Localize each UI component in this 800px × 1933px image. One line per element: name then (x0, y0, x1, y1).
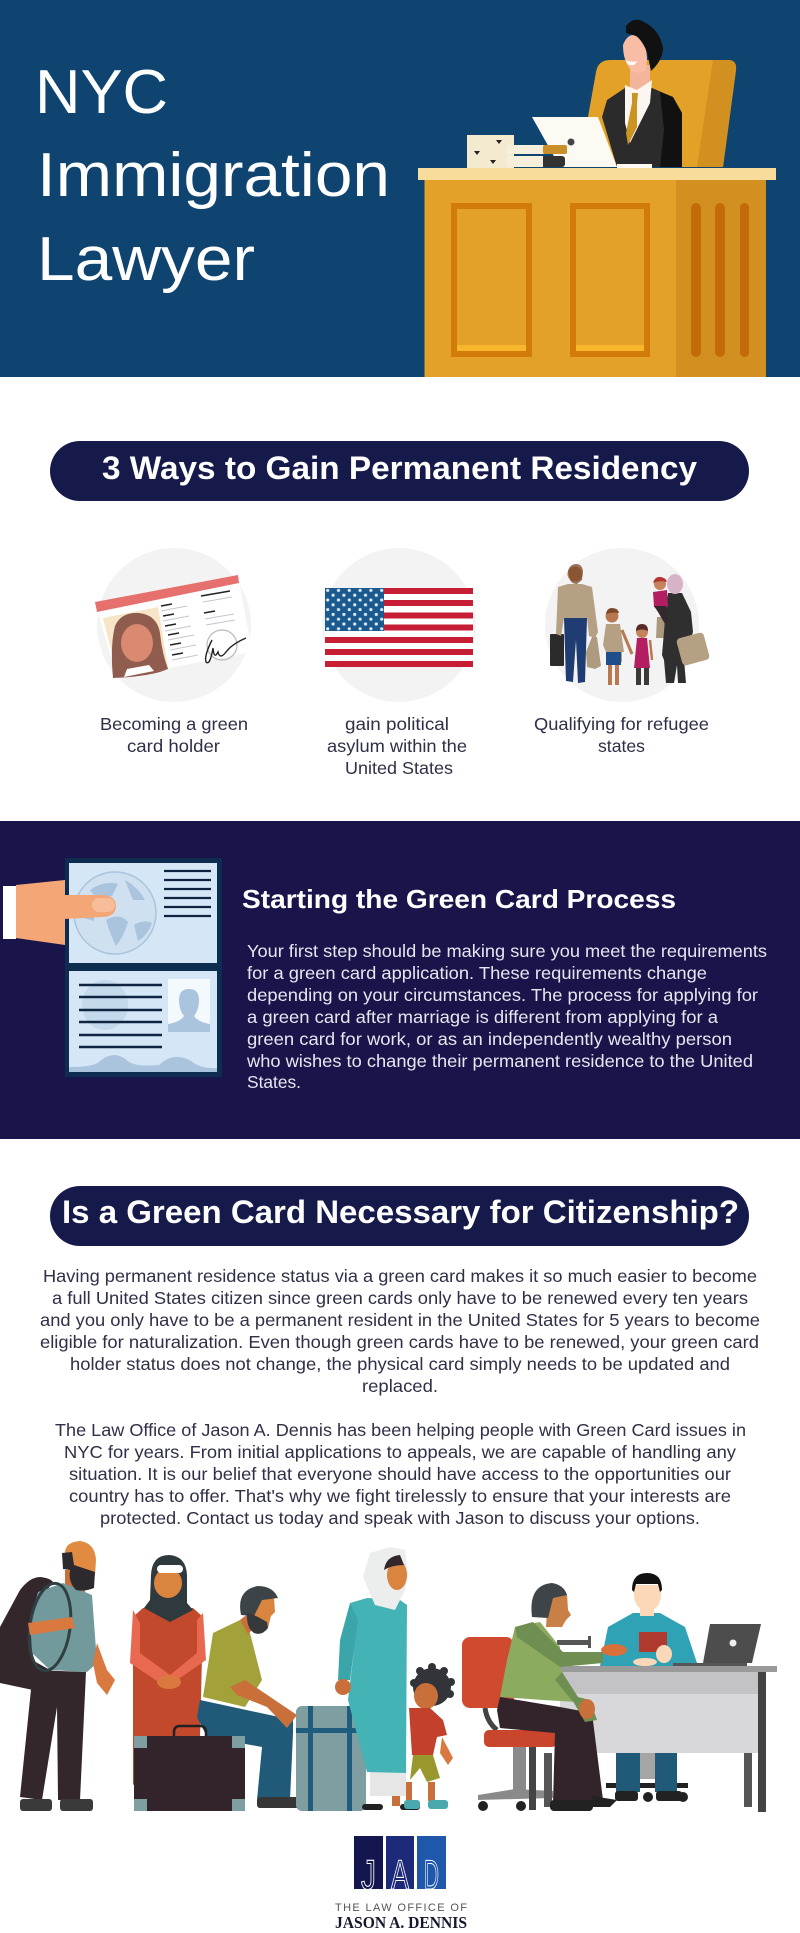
label (327, 714, 467, 778)
figure: officer (557, 1573, 698, 1802)
title: Lawyer (37, 225, 255, 294)
title: Immigration (37, 141, 390, 210)
heading: green card necessary: Is a Green Card Necessary for Citizenship? (62, 1194, 739, 1230)
text block: law office paragraph: NYC for years. From initial applications to appeals, we are capable of handling any (64, 1442, 736, 1462)
heading: Starting the Green Card Process (242, 884, 676, 914)
text block: law office paragraph: protected. Contact us today and speak with Jason to discuss your options. (100, 1508, 700, 1528)
text block: citizenship paragraph: eligible for naturalization. Even though green cards have to be renewed, your green card (40, 1332, 759, 1352)
title: NYC (35, 58, 168, 127)
text block (246, 941, 767, 1092)
text block: law office paragraph (55, 1420, 746, 1528)
icon: black suitcase (134, 1726, 245, 1811)
heading: 3 ways (50, 441, 749, 501)
text block: citizenship paragraph: holder status does not change, the physical card simply needs to be updated and (70, 1354, 730, 1374)
label: gain political (345, 714, 449, 734)
label (534, 714, 709, 756)
icon: desk (560, 1666, 777, 1812)
label (100, 714, 248, 756)
text block: citizenship paragraph: and you only have to be a permanent resident in the United States for 5 years to become (40, 1310, 760, 1330)
figure: woman in hijab (130, 1555, 206, 1785)
text block: law office paragraph: The Law Office of Jason A. Dennis has been helping people with Green Card issues in (55, 1420, 746, 1440)
illustration: consultation at desk (462, 1573, 777, 1812)
text block: law office paragraph: situation. It is our belief that everyone should have access to the opportunities our (69, 1464, 731, 1484)
figure: seated man (197, 1586, 306, 1808)
logo: law office of jason a. dennis: D (424, 1851, 439, 1898)
text block: citizenship paragraph (40, 1266, 760, 1396)
logo: law office of jason a. dennis: JASON A. DENNIS (335, 1913, 467, 1932)
figure: woman in teal dress (335, 1547, 420, 1810)
figure: seated applicant (497, 1583, 627, 1811)
text block: law office paragraph: country has to offer. That's why we fight tirelessly to ensure that your interests are (69, 1486, 731, 1506)
text block: green card for work, or as an independently wealthy person (247, 1029, 732, 1049)
icon: passport cards and hand (3, 858, 222, 1077)
figure: child (404, 1663, 455, 1809)
label: Qualifying for refugee (534, 714, 709, 734)
text block: a green card after marriage is different from applying for a (247, 1007, 718, 1027)
label: asylum within the (327, 736, 467, 756)
panel: refugee status (534, 548, 710, 756)
icon: laptop (673, 1624, 761, 1666)
logo: law office of jason a. dennis: THE LAW OFFICE OF (335, 1902, 467, 1914)
panel: hero banner (0, 0, 800, 377)
heading: 3 ways: 3 Ways to Gain Permanent Residency (102, 450, 697, 486)
text block: Your first step should be making sure you meet the requirements (247, 941, 767, 961)
title (35, 58, 390, 294)
icon: grey suitcase (296, 1706, 366, 1811)
text block: depending on your circumstances. The process for applying for (247, 985, 758, 1005)
label: states (598, 736, 645, 756)
figure: man with backpack (0, 1541, 115, 1811)
label: card holder (127, 736, 220, 756)
icon: office chair (462, 1637, 557, 1811)
icon: american flag (325, 588, 473, 667)
logo: law office of jason a. dennis: A (391, 1851, 409, 1898)
text block: citizenship paragraph: replaced. (362, 1376, 438, 1396)
icon: judge at desk (418, 20, 776, 377)
panel: green card holder (95, 548, 252, 756)
text block: citizenship paragraph: a full United States citizen since green cards only have to be renewed every ten years (52, 1288, 748, 1308)
panel: starting the green card process (0, 821, 800, 1139)
text block: citizenship paragraph: Having permanent residence status via a green card makes it so much easier to become (43, 1266, 757, 1286)
panel: political asylum (322, 548, 476, 778)
icon: refugee family (550, 564, 710, 685)
illustration: people waiting (0, 1541, 455, 1811)
label: Becoming a green (100, 714, 248, 734)
text block: States. (247, 1072, 301, 1092)
heading: green card necessary (50, 1186, 749, 1246)
logo: law office of jason a. dennis (335, 1836, 467, 1932)
logo: law office of jason a. dennis: J (361, 1851, 376, 1898)
icon: green card (95, 575, 252, 678)
text block: for a green card application. These requirements change (247, 963, 707, 983)
text block: who wishes to change their permanent residence to the United (246, 1051, 753, 1071)
label: United States (345, 758, 453, 778)
